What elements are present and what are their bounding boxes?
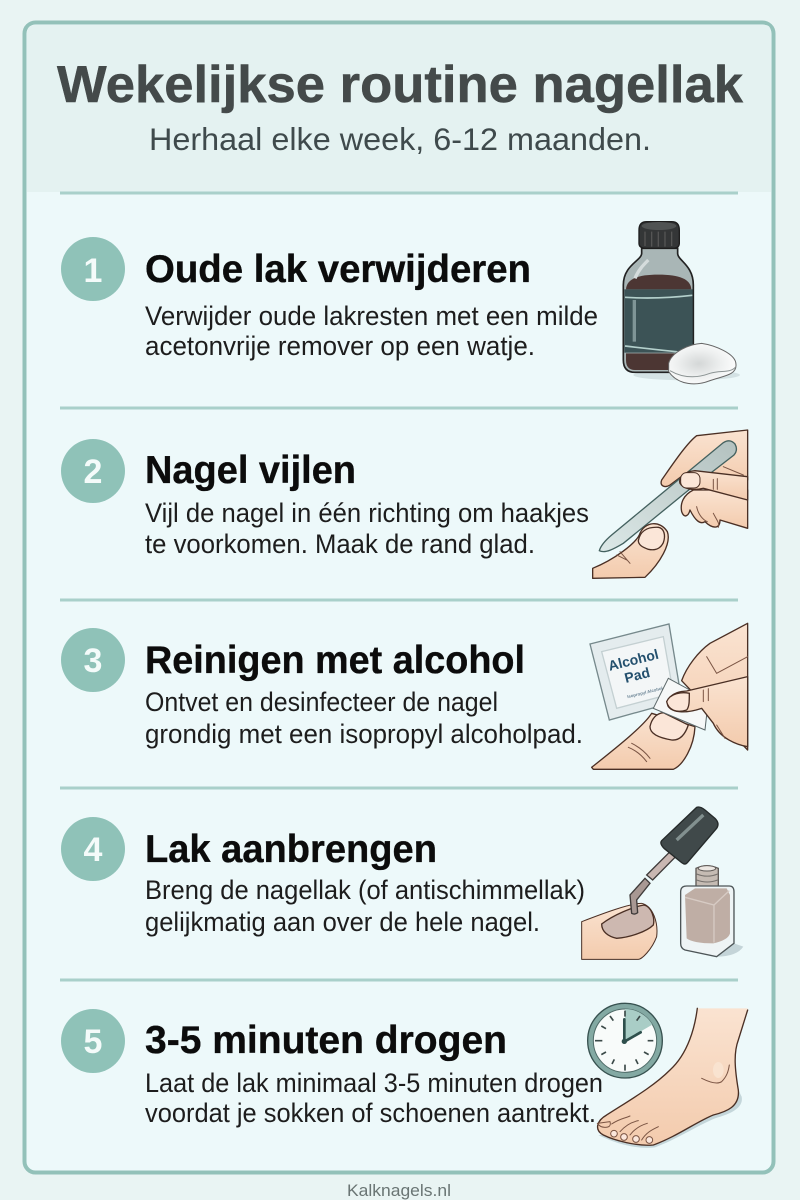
- icon: alcohol pad and hand: Alcohol: [607, 646, 660, 674]
- clock: [588, 1003, 662, 1078]
- step 2 description: [145, 498, 589, 559]
- step 5 heading: 3-5 minuten drogen: [145, 1019, 507, 1062]
- step 4 heading: Lak aanbrengen: [145, 828, 437, 871]
- step 2 description: te voorkomen. Maak de rand glad.: [145, 529, 535, 559]
- foot: [597, 1008, 748, 1148]
- step 3 heading: Reinigen met alcohol: [145, 639, 525, 682]
- step 4 description: Breng de nagellak (of antischimmellak): [145, 875, 585, 905]
- icon: remover bottle and cotton pad: [623, 222, 740, 384]
- step 4 number badge: 4: [84, 831, 103, 869]
- step 3 description: [145, 687, 583, 749]
- step 5 number badge: [61, 1009, 125, 1073]
- step 3 number badge: [61, 628, 125, 692]
- subtitle: Herhaal elke week, 6-12 maanden.: [149, 121, 651, 157]
- step 5 description: [145, 1068, 603, 1128]
- step 5: [61, 1003, 748, 1148]
- step 3: [61, 623, 748, 769]
- title: Wekelijkse routine nagellak: [57, 56, 743, 114]
- step 3 description: grondig met een isopropyl alcoholpad.: [145, 719, 583, 749]
- step 3 description: Ontvet en desinfecteer de nagel: [145, 687, 498, 717]
- step 4: [61, 807, 743, 959]
- icon: alcohol pad and hand: Pad: [623, 664, 652, 686]
- step 2: [61, 430, 748, 578]
- step 3 number badge: 3: [84, 642, 102, 680]
- step 1 number badge: [61, 237, 125, 301]
- step 1 number badge: 1: [84, 252, 102, 290]
- step 2 heading: Nagel vijlen: [145, 449, 356, 492]
- step 4 description: [145, 875, 585, 937]
- step 1 description: acetonvrije remover op een watje.: [145, 331, 535, 361]
- step 1 description: Verwijder oude lakresten met een milde: [145, 301, 598, 331]
- step 5 description: voordat je sokken of schoenen aantrekt.: [145, 1098, 596, 1128]
- step 1 heading: Oude lak verwijderen: [145, 248, 531, 291]
- step 1 description: [145, 301, 598, 361]
- icon: alcohol pad and hand: Isopropyl Alcohol: [627, 686, 663, 699]
- panel: header band: [27, 25, 771, 192]
- step 4 number badge: [61, 817, 125, 881]
- step 5 description: Laat de lak minimaal 3-5 minuten drogen: [145, 1068, 603, 1098]
- icon: clock and foot: [588, 1003, 748, 1148]
- step 2 description: Vijl de nagel in één richting om haakjes: [145, 498, 589, 528]
- step 5 number badge: 5: [84, 1023, 102, 1061]
- icon: hand filing nail: [593, 430, 748, 578]
- icon: nail polish brush and bottle: [582, 807, 743, 959]
- step 4 description: gelijkmatig aan over de hele nagel.: [145, 907, 540, 937]
- step 1: [61, 222, 740, 384]
- footer credit: Kalknagels.nl: [347, 1182, 451, 1200]
- step 2 number badge: [61, 439, 125, 503]
- icon: alcohol pad and hand: [590, 623, 748, 769]
- step 2 number badge: 2: [84, 453, 102, 491]
